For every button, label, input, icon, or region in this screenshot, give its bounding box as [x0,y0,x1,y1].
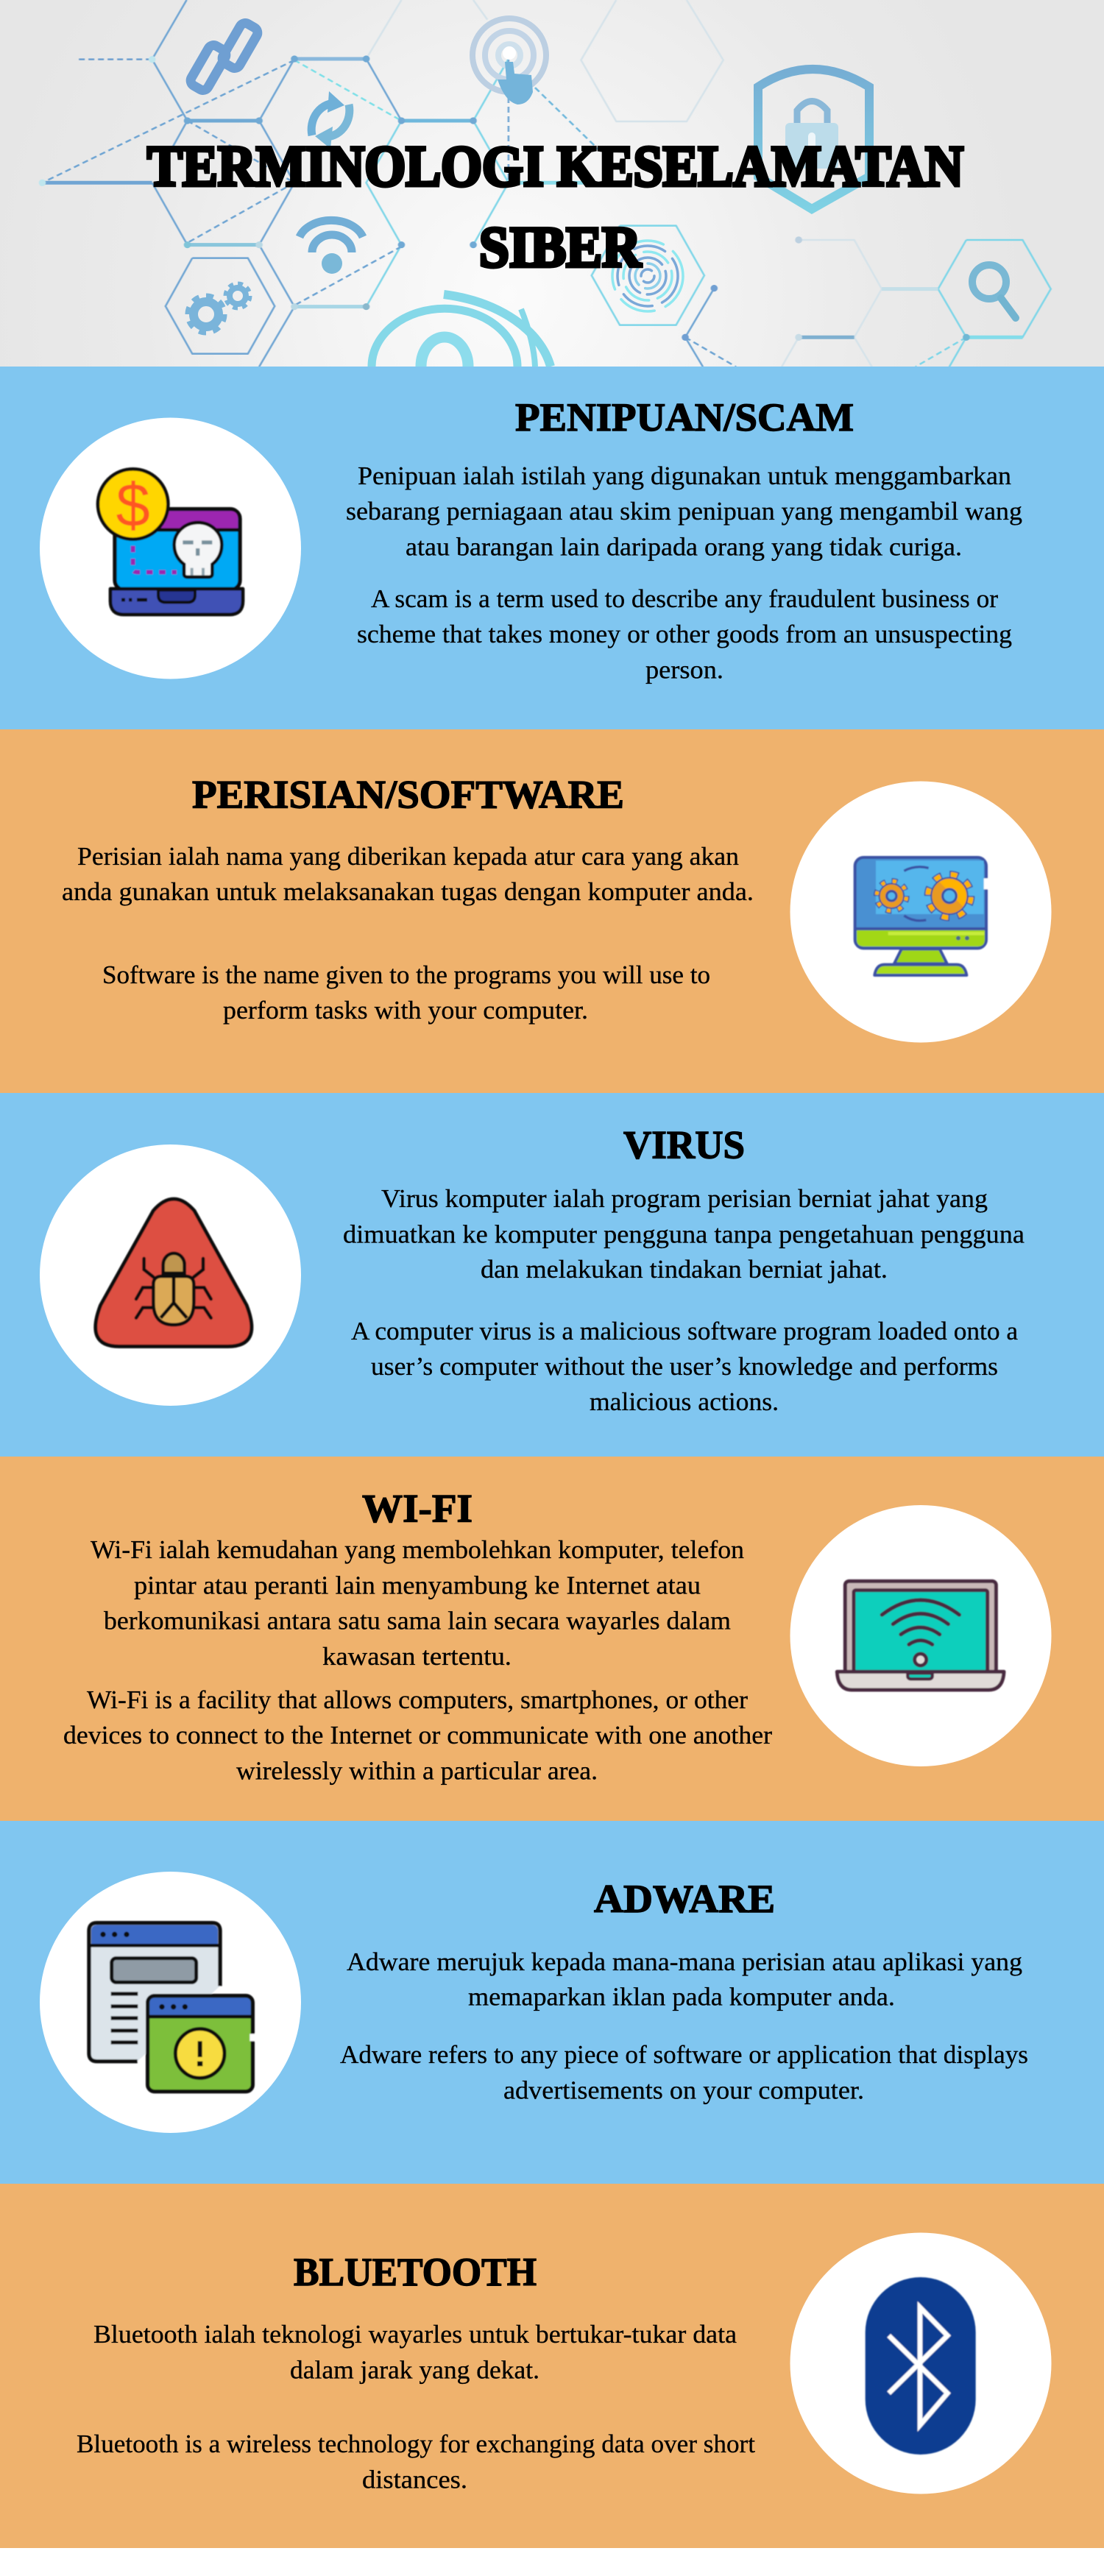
panel background [0,367,1104,729]
body text: anda gunakan untuk melaksanakan tugas dengan komputer anda. [62,877,754,906]
body text: sebarang perniagaan atau skim penipuan yang mengambil wang [346,497,1022,526]
body text: devices to connect to the Internet or communicate with one another [63,1721,772,1749]
icon: bottom signal rings [372,294,551,367]
panel: adware [0,1821,1104,2184]
icon: warning windows [89,1923,255,2092]
icon circle [40,418,301,679]
body text: Adware merujuk kepada mana-mana perisian atau aplikasi yang [347,1947,1022,1976]
icon: gears [188,283,250,333]
icon circle [790,1505,1051,1766]
body text: Virus komputer ialah program perisian berniat jahat yang [381,1184,988,1213]
body text: dalam jarak yang dekat. [290,2355,539,2385]
heading: ADWARE [594,1877,775,1921]
body text: Adware refers to any piece of software or application that displays [340,2040,1028,2069]
body text: berkomunikasi antara satu sama lain secara wayarles dalam [104,1606,731,1635]
body text: advertisements on your computer. [503,2076,864,2105]
panel: penipuan / scam [0,367,1104,729]
title [147,134,963,279]
body text [340,1947,1028,2105]
body text [343,1184,1025,1416]
body text: Bluetooth ialah teknologi wayarles untuk bertukar-tukar data [93,2320,737,2349]
body text: Software is the name given to the programs you will use to [102,960,710,989]
body text: Wi-Fi is a facility that allows computers, smartphones, or other [87,1685,748,1714]
icon: laptop scam: $ [116,471,150,539]
icon circle [790,782,1051,1042]
body text: kawasan tertentu. [322,1642,512,1671]
icon: refresh arrows [311,91,350,149]
body text: A scam is a term used to describe any fraudulent business or [371,584,998,613]
white footer strip [0,2548,1104,2576]
panel background [0,1821,1104,2184]
title: SIBER [479,215,643,279]
panel background [0,2184,1104,2548]
panel background [0,729,1104,1093]
body text: Penipuan ialah istilah yang digunakan untuk menggambarkan [358,461,1011,490]
body text: user’s computer without the user’s knowledge and performs [371,1352,998,1381]
body text [77,2320,755,2494]
heading: VIRUS [623,1123,745,1167]
heading: WI-FI [362,1487,473,1531]
body text: person. [645,655,723,684]
icon: fingerprint [612,241,683,311]
icon circle [40,1872,301,2133]
panel background [0,1457,1104,1821]
body text [63,1535,772,1786]
body text: Wi-Fi ialah kemudahan yang membolehkan komputer, telefon [91,1535,744,1564]
body text: malicious actions. [590,1387,779,1416]
body text: Bluetooth is a wireless technology for exchanging data over short [77,2430,755,2458]
panel: bluetooth [0,2184,1104,2548]
body text: memaparkan iklan pada komputer anda. [468,1983,895,2011]
body text: scheme that takes money or other goods from an unsuspecting [357,620,1012,648]
icon: monitor with gears [855,857,988,975]
panel: perisian / software [0,729,1104,1093]
body text: perform tasks with your computer. [223,996,588,1025]
header banner [0,0,1104,367]
body text: dan melakukan tindakan berniat jahat. [481,1255,888,1284]
body text: A computer virus is a malicious software program loaded onto a [351,1317,1018,1345]
icon: bug warning triangle [96,1199,252,1346]
body text: distances. [362,2466,467,2494]
heading: PERISIAN/SOFTWARE [192,773,624,817]
body text: atau barangan lain daripada orang yang tidak curiga. [406,533,962,561]
heading: PENIPUAN/SCAM [515,395,854,439]
body text [346,461,1022,684]
icon: shield with padlock [758,69,869,209]
icon: chain link [188,21,260,92]
title: TERMINOLOGI KESELAMATAN [147,134,963,198]
body text: pintar atau peranti lain menyambung ke Internet atau [134,1571,701,1600]
panel: virus [0,1093,1104,1457]
icon: bluetooth symbol [866,2277,976,2455]
panel: wi-fi [0,1457,1104,1821]
body text: dimuatkan ke komputer pengguna tanpa pengetahuan pengguna [343,1220,1025,1248]
body text: wirelessly within a particular area. [236,1756,598,1786]
icon circle [40,1144,301,1406]
icon: laptop with wifi [837,1581,1004,1690]
heading: BLUETOOTH [294,2250,537,2294]
hexagon network lines [39,0,1051,367]
icon: magnifier [972,265,1016,318]
icon: touch hand with rings [473,18,546,105]
icon: laptop scam [98,469,243,615]
panel background [0,1093,1104,1457]
header background [0,0,1104,367]
icon: wifi signal [300,220,363,274]
body text: Perisian ialah nama yang diberikan kepada atur cara yang akan [77,842,739,871]
icon circle [790,2233,1051,2494]
body text [62,842,754,1025]
